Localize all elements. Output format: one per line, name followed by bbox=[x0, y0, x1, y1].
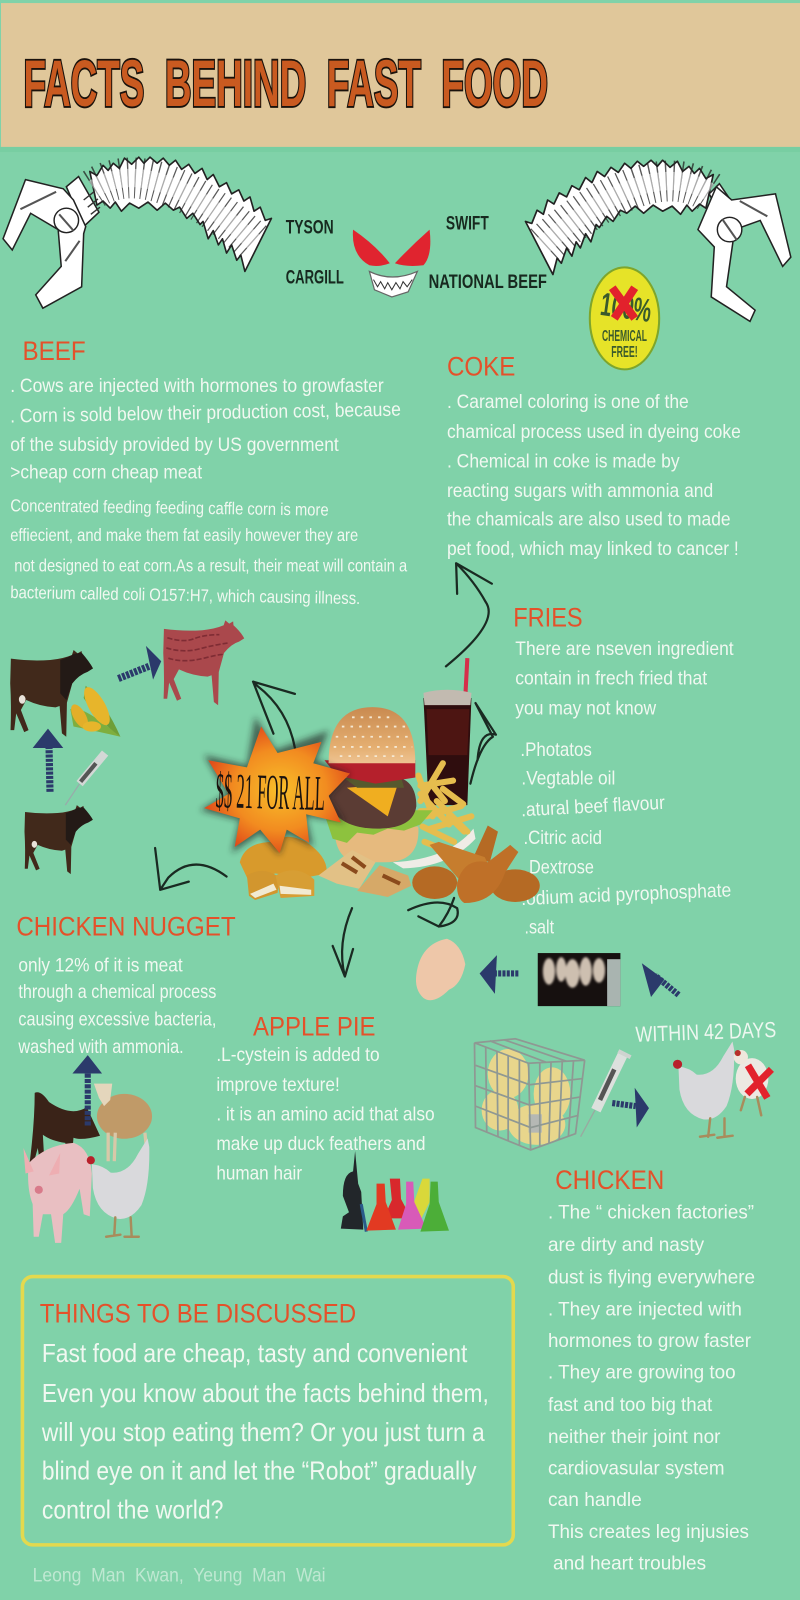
arrow: injected cow up bbox=[33, 729, 63, 792]
fries text: .Citric acid bbox=[523, 827, 602, 849]
arrow: cow to meat bbox=[118, 646, 161, 680]
chicken text: neither their joint nor bbox=[548, 1426, 721, 1448]
title banner bbox=[0, 3, 800, 152]
icon: burger bbox=[324, 707, 433, 862]
chicken text bbox=[548, 1201, 755, 1574]
panel: apple pie bbox=[216, 1012, 449, 1232]
icon: fries bbox=[418, 763, 471, 850]
arrow to chicken nugget bbox=[155, 848, 227, 890]
meal image bbox=[240, 658, 540, 903]
icon: brown cow with corn bbox=[10, 650, 120, 737]
arrow to coke bbox=[446, 563, 492, 666]
apple pie text bbox=[216, 1044, 435, 1185]
coke text: pet food, which may linked to cancer ! bbox=[447, 538, 739, 560]
apple pie text: improve texture! bbox=[216, 1074, 340, 1096]
icon: chemical free stamp: 100% bbox=[598, 285, 654, 329]
nugget text: causing excessive bacteria, bbox=[18, 1009, 216, 1031]
discussion text: control the world? bbox=[42, 1494, 223, 1524]
credits: Leong Man Kwan, Yeung Man Wai bbox=[33, 1565, 326, 1587]
panel: beef bbox=[10, 336, 407, 608]
apple pie text: .L-cystein is added to bbox=[216, 1044, 380, 1066]
icon: apple pies bbox=[318, 850, 411, 897]
company names: TYSON bbox=[286, 217, 334, 239]
arrow: feed up bbox=[72, 1055, 102, 1126]
coke text: . Caramel coloring is one of the bbox=[447, 391, 689, 413]
beef text bbox=[10, 375, 407, 608]
icon: chemical free stamp: FREE! bbox=[611, 344, 638, 361]
company names: SWIFT bbox=[446, 213, 489, 235]
arrow: slaughter to raw chicken bbox=[480, 955, 518, 994]
fries text: .odium acid pyrophosphate bbox=[521, 879, 732, 910]
coke text: . Chemical in coke is made by bbox=[447, 450, 680, 472]
icon: nuggets bbox=[240, 837, 327, 900]
icon: white hen bbox=[87, 1138, 149, 1237]
heading: fries: FRIES bbox=[513, 603, 583, 633]
chicken text: and heart troubles bbox=[553, 1552, 706, 1574]
discussion text: will you stop eating them? Or you just turn a bbox=[41, 1417, 485, 1447]
icon: microscope and flasks bbox=[341, 1151, 449, 1232]
chicken text: cardiovasular system bbox=[548, 1457, 724, 1479]
icon: chemical free stamp bbox=[590, 267, 659, 369]
apple pie text: make up duck feathers and bbox=[216, 1133, 426, 1155]
arrow to chicken bbox=[408, 898, 458, 927]
burst: price bbox=[200, 716, 350, 855]
company names bbox=[286, 213, 547, 293]
company names: CARGILL bbox=[286, 267, 344, 289]
icon: drink bbox=[423, 658, 471, 805]
animals group bbox=[23, 1055, 152, 1243]
icon: young cow bbox=[24, 805, 93, 874]
chicken text: fast and too big that bbox=[548, 1394, 713, 1416]
panel: fries bbox=[513, 603, 734, 939]
heading: chicken: CHICKEN bbox=[555, 1165, 664, 1195]
beef process icons bbox=[10, 620, 244, 874]
icon: syringe bbox=[581, 1051, 631, 1137]
beef text: . Cows are injected with hormones to growfaster bbox=[10, 375, 384, 397]
coke text: the chamicals are also used to made bbox=[447, 509, 731, 531]
arrow: syringe to hen bbox=[612, 1088, 649, 1128]
icon: chemical free stamp: CHEMICAL bbox=[602, 328, 647, 345]
beef text: effiecient, and make them fat easily however they are bbox=[10, 525, 358, 545]
beef text: of the subsidy provided by US government bbox=[10, 434, 339, 456]
coke text bbox=[447, 391, 741, 560]
panel: chicken nugget bbox=[16, 912, 236, 1058]
chicken text: . The “ chicken factories” bbox=[548, 1201, 754, 1223]
heading: discussed: THINGS TO BE DISCUSSED bbox=[40, 1298, 356, 1328]
fries text: .Dextrose bbox=[524, 856, 594, 878]
arrow to apple pie bbox=[333, 908, 353, 977]
icon: pig bbox=[23, 1143, 92, 1243]
apple pie text: human hair bbox=[216, 1163, 303, 1185]
discussion text: Fast food are cheap, tasty and convenient bbox=[42, 1338, 468, 1368]
company names: NATIONAL BEEF bbox=[429, 271, 547, 293]
heading: beef: BEEF bbox=[22, 336, 86, 366]
fries text: There are nseven ingredient bbox=[515, 638, 734, 660]
chicken text: . They are growing too bbox=[548, 1362, 736, 1384]
icon: sheep bbox=[94, 1084, 152, 1161]
discussion text: blind eye on it and let the “Robot” gradually bbox=[42, 1456, 477, 1486]
hand drawn arrows bbox=[155, 563, 496, 977]
text: $$ 21 FOR ALL bbox=[215, 762, 326, 821]
beef text: >cheap corn cheap meat bbox=[10, 462, 203, 484]
panel: things to be discussed bbox=[22, 1277, 513, 1545]
panel: coke bbox=[447, 352, 741, 560]
fries text: you may not know bbox=[515, 697, 657, 719]
icon: chicks in cage bbox=[474, 1039, 585, 1150]
icon: left robot arm bbox=[3, 157, 271, 308]
icon: devil face bbox=[353, 230, 430, 297]
icon: raw chicken bbox=[416, 939, 465, 1000]
icon: syringe bbox=[65, 753, 105, 805]
beef text: Concentrated feeding feeding caffle corn is more bbox=[10, 495, 329, 520]
chicken text: dust is flying everywhere bbox=[548, 1267, 755, 1289]
arrow: hen to slaughter bbox=[642, 963, 679, 997]
panel: chicken bbox=[548, 1165, 755, 1574]
arrow to fries bbox=[470, 703, 496, 784]
coke text: chamical process used in dyeing coke bbox=[447, 421, 741, 443]
nugget text bbox=[18, 954, 216, 1058]
arrow to beef bbox=[253, 682, 295, 748]
fries text: .Vegtable oil bbox=[521, 768, 615, 790]
chicken text: are dirty and nasty bbox=[548, 1234, 704, 1256]
icon: fried chicken bbox=[412, 826, 540, 903]
icon: grown hen bbox=[673, 1041, 734, 1138]
icon: mixed feed cow bbox=[30, 1092, 100, 1171]
beef text: . Corn is sold below their production cost, because bbox=[10, 399, 401, 427]
heading: coke: COKE bbox=[447, 352, 515, 382]
discussion text bbox=[41, 1338, 489, 1524]
icon: crossed small hen bbox=[734, 1050, 771, 1115]
chicken text: . They are injected with bbox=[548, 1298, 742, 1320]
chicken process icons bbox=[416, 939, 777, 1150]
chicken text: This creates leg injusies bbox=[548, 1521, 749, 1543]
icon: ground meat cow bbox=[163, 620, 244, 705]
fries text: .salt bbox=[524, 917, 555, 939]
nugget text: washed with ammonia. bbox=[18, 1036, 184, 1058]
fries text: .Photatos bbox=[520, 739, 592, 761]
fries text: .atural beef flavour bbox=[521, 792, 666, 821]
beef text: not designed to eat corn.As a result, their meat will contain a bbox=[14, 555, 407, 575]
chicken text: hormones to grow faster bbox=[548, 1330, 752, 1352]
beef text: bacterium called coli O157:H7, which causing illness. bbox=[10, 582, 360, 608]
discussion text: Even you know about the facts behind them, bbox=[42, 1378, 489, 1408]
icon: slaughter line photo bbox=[538, 953, 620, 1006]
nugget text: through a chemical process bbox=[18, 981, 216, 1003]
heading: apple pie: APPLE PIE bbox=[253, 1012, 376, 1042]
coke text: reacting sugars with ammonia and bbox=[447, 480, 713, 502]
nugget text: only 12% of it is meat bbox=[18, 954, 183, 976]
apple pie text: . it is an amino acid that also bbox=[216, 1103, 435, 1125]
heading: chicken nugget: CHICKEN NUGGET bbox=[16, 912, 236, 942]
chicken text: can handle bbox=[548, 1489, 642, 1511]
fries text bbox=[515, 638, 734, 939]
plate bbox=[393, 829, 476, 868]
icon: right robot arm bbox=[525, 160, 791, 321]
fries text: contain in frech fried that bbox=[515, 668, 708, 690]
